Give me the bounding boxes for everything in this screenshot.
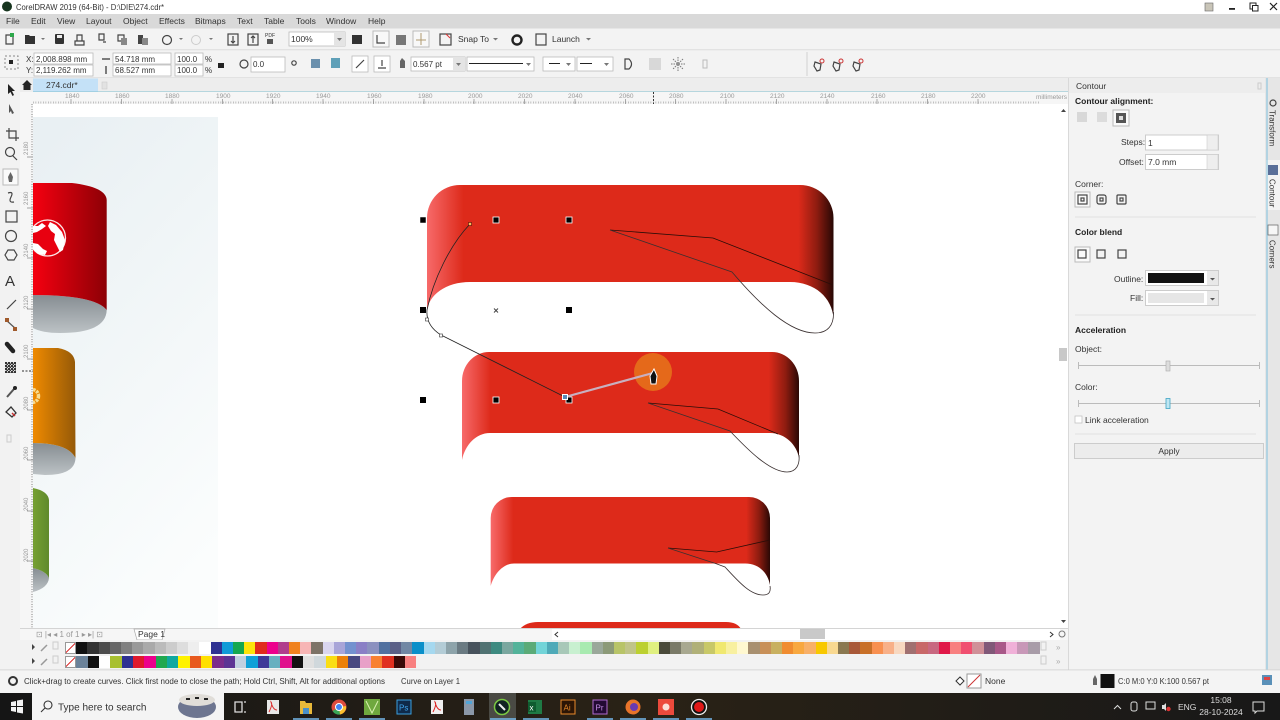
- apply button: Apply: [1158, 446, 1180, 456]
- page background panel: [33, 117, 218, 628]
- system tray: 28-10-2024: [1199, 707, 1243, 717]
- icon: globe: [30, 220, 66, 256]
- horizontal ruler: millimeters: [1036, 94, 1068, 101]
- horizontal ruler: 2100: [720, 93, 735, 100]
- acceleration sliders: Color:: [1075, 382, 1098, 392]
- red banner 1: [427, 185, 834, 333]
- property bar: 2,008.898 mm: [36, 55, 87, 64]
- fill indicator: None: [985, 676, 1006, 686]
- document tab bar: [0, 78, 1068, 92]
- task view icon: [235, 702, 246, 712]
- horizontal ruler: 2180: [921, 93, 936, 100]
- horizontal ruler: 2020: [518, 93, 533, 100]
- menu bar: Text: [237, 16, 253, 26]
- vertical ruler: 2140: [24, 243, 30, 257]
- red banner 3: [491, 497, 770, 595]
- vertical ruler: 2040: [24, 497, 30, 511]
- canvas scrollbar: [1058, 104, 1068, 629]
- system tray: [1114, 695, 1264, 717]
- taskbar: [0, 693, 1280, 720]
- app icons: Ps: [399, 704, 408, 712]
- palette background: [0, 640, 1068, 670]
- horizontal ruler: 1880: [165, 93, 180, 100]
- acceleration sliders: Acceleration: [1075, 325, 1126, 335]
- red banner 4: [520, 622, 741, 629]
- property bar: 0.567 pt: [413, 60, 443, 69]
- hand icons: [814, 59, 863, 71]
- docker panel: contour: [1068, 78, 1265, 670]
- page tab: Page 1: [138, 629, 165, 639]
- property bar: 100.0: [177, 66, 198, 75]
- icon: search image: [178, 694, 216, 718]
- docker title: Contour: [1076, 81, 1106, 91]
- app icons: [267, 693, 706, 720]
- palette background: »: [1056, 643, 1061, 652]
- color palette row 1: [65, 642, 1040, 654]
- search box: Type here to search: [58, 702, 146, 714]
- selection handles: [420, 217, 572, 403]
- property bar: 0.0: [253, 60, 265, 69]
- system tray: 15:08: [1210, 695, 1232, 705]
- title bar: [0, 0, 1280, 14]
- menu bar: Edit: [31, 16, 46, 26]
- standard toolbar: PDF: [265, 33, 275, 39]
- acceleration sliders: Link acceleration: [1085, 415, 1149, 425]
- icon: gear: [26, 390, 38, 402]
- icon: home: [22, 80, 32, 90]
- horizontal ruler: 2040: [568, 93, 583, 100]
- horizontal ruler: [20, 92, 1068, 104]
- menu bar: Object: [123, 16, 148, 26]
- vertical ruler: 2080: [24, 396, 30, 410]
- property bar: 54.718 mm: [115, 55, 155, 64]
- offset field: [1119, 154, 1218, 170]
- property bar: 2,119.262 mm: [36, 66, 87, 75]
- icon: windows start: [11, 700, 23, 714]
- vertical ruler: 2100: [24, 344, 30, 358]
- horizontal ruler: 1920: [266, 93, 281, 100]
- left toolbox: [0, 78, 20, 640]
- property bar: X:: [26, 55, 34, 64]
- color blend: Color blend: [1075, 227, 1122, 237]
- menu bar: File: [6, 16, 20, 26]
- orange cylinder: [26, 348, 76, 475]
- vertical ruler: 2060: [24, 446, 30, 460]
- horizontal ruler: 2120: [770, 93, 785, 100]
- vertical ruler: 2180: [24, 141, 30, 155]
- horizontal ruler: 1840: [65, 93, 80, 100]
- menu bar: Table: [264, 16, 285, 26]
- icon: app logo: [2, 2, 12, 12]
- property bar: %: [205, 55, 212, 64]
- vertical ruler: 2020: [24, 548, 30, 562]
- canvas: [26, 104, 1069, 629]
- outline width: [411, 57, 465, 71]
- standard toolbar: [0, 28, 1280, 50]
- docker side tabs: Corners: [1268, 240, 1276, 268]
- docker side tabs: Transform: [1268, 110, 1276, 146]
- status bar: [0, 670, 1280, 693]
- vertical ruler: [20, 92, 33, 629]
- menu bar: Effects: [159, 16, 185, 26]
- menu bar: Help: [368, 16, 386, 26]
- tab: [33, 78, 98, 92]
- green cylinder: [33, 488, 49, 592]
- search box: [32, 693, 224, 720]
- app icons: Ai: [564, 704, 571, 712]
- horizontal ruler: 2200: [971, 93, 986, 100]
- zoom box: [289, 32, 345, 46]
- menu bar: Bitmaps: [195, 16, 226, 26]
- steps field: 1: [1148, 138, 1153, 148]
- rotation: [240, 60, 248, 68]
- offset field: Offset:: [1119, 157, 1144, 167]
- color blend: Outline:: [1114, 274, 1143, 284]
- steps field: Steps:: [1121, 137, 1145, 147]
- vertical ruler: 2120: [24, 295, 30, 309]
- left toolbox: A: [5, 273, 15, 290]
- active app indicators: [293, 718, 712, 720]
- docker side tabs: [1265, 78, 1280, 670]
- app icons: x: [530, 704, 534, 712]
- menu bar: View: [57, 16, 76, 26]
- apply button: [1074, 444, 1264, 458]
- color blend: [1075, 227, 1218, 306]
- property bar: [0, 50, 1280, 78]
- menu bar: Window: [326, 16, 357, 26]
- window controls: [1205, 3, 1277, 11]
- horizontal ruler: 1980: [418, 93, 433, 100]
- page navigator: [20, 628, 1068, 640]
- status message: Click+drag to create curves. Click first node to close the path; Hold Ctrl, Shift, Alt for additional options: [24, 676, 385, 686]
- fill indicator: [956, 674, 1006, 688]
- horizontal ruler: 1940: [316, 93, 331, 100]
- palette background: »: [1056, 657, 1061, 666]
- property bar: 68.527 mm: [115, 66, 155, 75]
- color blend: Fill:: [1130, 293, 1143, 303]
- horizontal ruler: 2080: [669, 93, 684, 100]
- property bar: Y:: [26, 66, 33, 75]
- menu bar: [0, 14, 1280, 28]
- standard toolbar: Snap To: [458, 34, 489, 44]
- outline indicator: [1093, 674, 1210, 688]
- horizontal ruler: 2140: [820, 93, 835, 100]
- menu bar: Tools: [296, 16, 316, 26]
- acceleration sliders: Object:: [1075, 344, 1102, 354]
- contour alignment: Contour alignment:: [1075, 96, 1154, 106]
- status bar: Curve on Layer 1: [401, 676, 460, 686]
- horizontal ruler: 2000: [468, 93, 483, 100]
- standard toolbar: Launch: [552, 34, 580, 44]
- horizontal ruler: 2160: [871, 93, 886, 100]
- page navigator: ⊡ |◂ ◂ 1 of 1 ▸ ▸| ⊡: [36, 630, 103, 639]
- color palette row 2: [65, 656, 416, 668]
- drawn curve with nodes: [426, 222, 565, 397]
- horizontal ruler: 1860: [115, 93, 130, 100]
- acceleration sliders: [1075, 325, 1260, 425]
- horizontal ruler: 1900: [216, 93, 231, 100]
- menu bar: Layout: [86, 16, 112, 26]
- horizontal ruler: 2060: [619, 93, 634, 100]
- app icons: Pr: [596, 704, 604, 712]
- standard toolbar: 100%: [291, 34, 313, 44]
- contour alignment: [1075, 96, 1154, 126]
- window title: CorelDRAW 2019 (64-Bit) - D:\DIE\274.cdr*: [16, 2, 165, 12]
- cursor highlight and pen: [562, 353, 672, 400]
- red banner 2: [462, 352, 799, 472]
- docker side tabs: Contour: [1268, 179, 1276, 208]
- vertical ruler: 2160: [24, 191, 30, 205]
- corner options: [1075, 179, 1126, 207]
- property bar: %: [205, 66, 212, 75]
- red cylinder: [30, 183, 107, 333]
- property bar: 100.0: [177, 55, 198, 64]
- tab: 274.cdr*: [46, 80, 78, 90]
- offset field: 7.0 mm: [1148, 157, 1176, 167]
- corner options: Corner:: [1075, 179, 1103, 189]
- system tray: ENG: [1178, 702, 1196, 712]
- horizontal ruler: 1960: [367, 93, 382, 100]
- steps field: [1121, 135, 1218, 150]
- outline indicator: C:0 M:0 Y:0 K:100 0.567 pt: [1118, 676, 1210, 686]
